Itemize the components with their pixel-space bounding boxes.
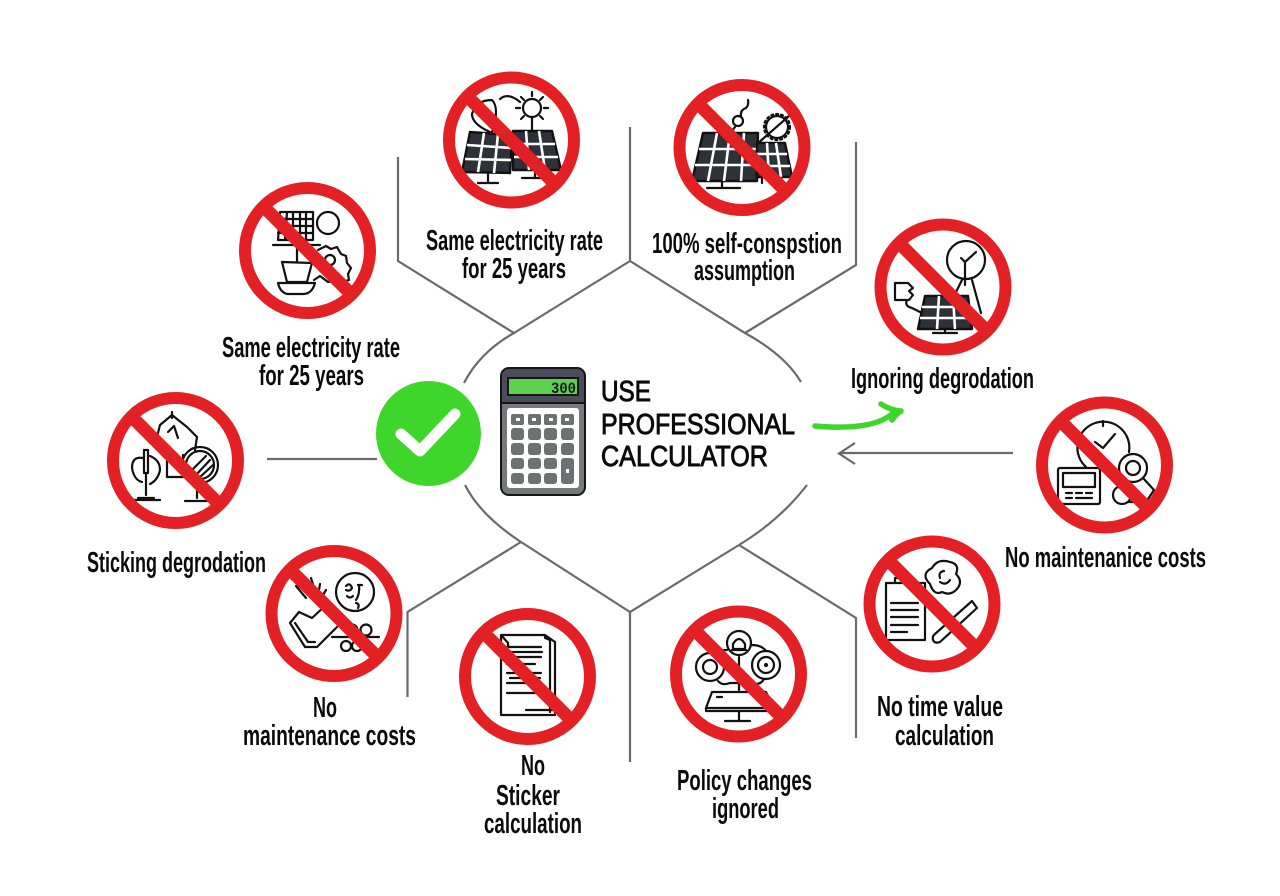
heading: use professional calculator	[601, 376, 795, 473]
label	[243, 692, 416, 752]
panel: no maintenance costs bottom left	[243, 551, 416, 752]
label: Sticking degrodation	[87, 547, 266, 579]
label	[222, 332, 400, 392]
panel: top same electricity rate	[426, 78, 603, 285]
label	[877, 691, 1003, 752]
panel: ignoring degradation	[851, 224, 1034, 395]
label	[484, 750, 582, 840]
icon: solar panels with sun, prohibited	[449, 78, 574, 202]
icon: clipboard, cloud and pen, prohibited	[870, 542, 994, 666]
arrow: green curved	[815, 404, 901, 427]
icon: green check badge	[376, 381, 481, 486]
label: for 25 years	[462, 253, 566, 285]
icon: clock, device and gear, prohibited	[1042, 402, 1167, 528]
icon: solar panels with gear, prohibited	[680, 85, 804, 210]
icon: calculator: 300	[551, 380, 576, 398]
icon: hand, face and flowers, prohibited	[272, 551, 396, 676]
label: Same electricity rate	[426, 225, 603, 257]
label: 100% self-conspstion	[652, 228, 842, 260]
label: Sticker	[496, 780, 560, 812]
label	[652, 228, 842, 287]
panel: sticking degradation	[87, 398, 266, 579]
panel: top 100% self-consumption	[652, 85, 842, 287]
panel: no sticker calculation	[465, 614, 590, 840]
label: Ignoring degrodation	[851, 363, 1034, 395]
icon: document, prohibited	[465, 614, 590, 739]
label: Policy changes	[677, 765, 812, 797]
label: No	[521, 750, 545, 782]
label: for 25 years	[259, 360, 364, 392]
panel: no maintenance costs right	[1005, 402, 1206, 574]
label: maintenance costs	[243, 720, 416, 752]
label: calculation	[895, 720, 994, 752]
heading: use professional calculator: USE	[601, 376, 651, 408]
arrow: grey pointing to centre	[839, 443, 1013, 464]
panel: policy changes ignored	[676, 612, 812, 825]
heading: use professional calculator: PROFESSIONAL	[601, 409, 795, 441]
icon: panel, cup and gear, prohibited	[245, 188, 370, 313]
panel: left same electricity rate	[222, 188, 400, 392]
icon: calculator	[501, 368, 585, 495]
icon: monitor with dials, prohibited	[676, 612, 801, 736]
label: No	[313, 692, 337, 724]
connector network	[267, 127, 856, 762]
label	[677, 765, 812, 825]
label: calculation	[484, 808, 582, 840]
label	[426, 225, 603, 285]
panel: no time value calculation	[870, 542, 1003, 752]
icon: panel and clock on tripod, prohibited	[880, 224, 1006, 350]
heading: use professional calculator: CALCULATOR	[601, 441, 768, 473]
label: ignored	[712, 793, 779, 825]
label: assumption	[694, 255, 795, 287]
label: Same electricity rate	[222, 332, 400, 364]
label: No time value	[877, 691, 1003, 723]
icon: tree, cactus and mirror, prohibited	[113, 398, 238, 523]
